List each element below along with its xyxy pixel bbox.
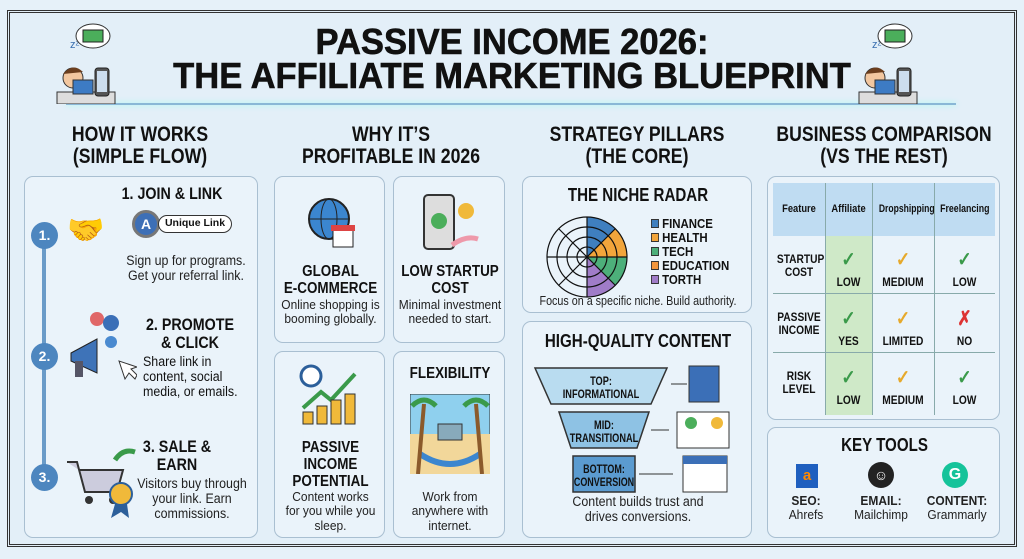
- legend: HEALTH: [662, 230, 708, 245]
- heading: strategy pillars: (THE CORE): [586, 145, 688, 168]
- icon: sleeping person left: zᶻ: [70, 39, 80, 51]
- icon: ahrefs: [796, 464, 818, 488]
- panel: flexibility: [393, 351, 505, 538]
- heading: how it works: HOW IT WORKS: [72, 123, 208, 146]
- icon: sleeping person left: [56, 24, 116, 104]
- table: ✓: [841, 249, 856, 271]
- heading: business comparison: (VS THE REST): [820, 145, 948, 168]
- legend: EDUCATION: [662, 258, 729, 273]
- panel: high-quality content: HIGH-QUALITY CONTENT: [545, 331, 731, 351]
- title: PASSIVE INCOME 2026:: [315, 21, 709, 62]
- panel: flexibility: FLEXIBILITY: [410, 365, 490, 382]
- panel: high-quality content: drives conversions.: [585, 509, 691, 524]
- panel: high-quality content: TOP:: [590, 376, 612, 388]
- heading: strategy pillars: STRATEGY PILLARS: [550, 123, 724, 146]
- icon: handshake: 🤝: [67, 214, 104, 247]
- table: Freelancing: [940, 203, 990, 215]
- heading: how it works: (SIMPLE FLOW): [73, 145, 207, 168]
- panel: key tools: [767, 427, 1000, 538]
- panel: high-quality content: Content builds trust and: [572, 494, 704, 509]
- icon: growth coins: [300, 364, 356, 424]
- icon: sleeping person right: zᶻ: [872, 39, 882, 51]
- panel: global e-commerce: GLOBAL: [302, 263, 359, 280]
- panel: how it works: media, or emails.: [143, 384, 238, 399]
- panel: how it works: [24, 176, 258, 538]
- table: MEDIUM: [882, 393, 924, 407]
- step 3: EARN: [157, 455, 197, 474]
- panel: key tools: Grammarly: [927, 507, 987, 522]
- table: INCOME: [779, 323, 819, 337]
- table: ✓: [896, 308, 910, 330]
- panel: flexibility: Work from: [423, 489, 477, 504]
- panel: key tools: KEY TOOLS: [841, 435, 928, 455]
- icon: grammarly: [942, 462, 968, 488]
- panel: low startup cost: COST: [431, 280, 469, 297]
- icon: mailchimp: [868, 462, 894, 488]
- timeline: [42, 232, 46, 482]
- legend: FINANCE: [662, 216, 713, 231]
- panel: global e-commerce: Online shopping is: [281, 297, 380, 312]
- panel: how it works: 2.: [39, 348, 50, 364]
- title: THE AFFILIATE MARKETING BLUEPRINT: [173, 55, 851, 96]
- panel: low startup cost: Minimal investment: [399, 297, 501, 312]
- heading: business comparison: BUSINESS COMPARISON: [776, 123, 992, 146]
- table: ✓: [896, 249, 910, 271]
- step numbers: [31, 222, 58, 249]
- icon: unique link: Unique Link: [165, 217, 225, 229]
- table: LOW: [837, 275, 860, 289]
- panel: how it works: content, social: [143, 369, 222, 384]
- panel: global e-commerce: E-COMMERCE: [284, 280, 377, 297]
- panel: passive income potential: sleep.: [315, 518, 346, 533]
- panel: passive income potential: PASSIVE: [302, 439, 359, 456]
- icon: megaphone: [70, 312, 137, 380]
- heading: why profitable: PROFITABLE IN 2026: [302, 145, 480, 168]
- panel: how it works: 3.: [39, 469, 50, 485]
- panel: niche radar: THE NICHE RADAR: [568, 185, 708, 205]
- panel: key tools: CONTENT:: [927, 493, 987, 508]
- icon: mailchimp: ☺: [874, 467, 888, 483]
- panel: comparison table: [767, 176, 1000, 420]
- panel: global e-commerce: [274, 176, 385, 343]
- radar chart: [546, 216, 628, 298]
- panel: high-quality content: INFORMATIONAL: [563, 389, 639, 401]
- divider glow: [66, 103, 956, 105]
- panel: flexibility: internet.: [428, 518, 472, 533]
- panel: high-quality content: [522, 321, 752, 538]
- heading: why profitable: [302, 123, 480, 168]
- table: STARTUP: [777, 252, 824, 266]
- table: LOW: [837, 393, 860, 407]
- panel: how it works: Share link in: [143, 354, 211, 369]
- table: [773, 183, 995, 415]
- icon: beach hammock: [410, 394, 490, 474]
- panel: key tools: Mailchimp: [854, 507, 908, 522]
- icon: sleeping person right: [858, 24, 918, 104]
- icon: phone money: [423, 194, 479, 250]
- panel: niche radar: Focus on a specific niche. Build authority.: [540, 294, 736, 308]
- table: ✗: [957, 308, 972, 330]
- panel: low startup cost: LOW STARTUP: [401, 263, 499, 280]
- panel: passive income potential: INCOME: [304, 456, 357, 473]
- table: Dropshipping: [879, 203, 935, 215]
- table: MEDIUM: [882, 275, 924, 289]
- table: COST: [785, 265, 813, 279]
- panel: global e-commerce: booming globally.: [284, 311, 377, 326]
- table: LOW: [953, 393, 976, 407]
- legend: TECH: [662, 244, 693, 259]
- panel: passive income potential: [274, 351, 385, 538]
- table: Feature: [782, 203, 816, 215]
- legend: [651, 216, 729, 287]
- step 2: & CLICK: [161, 333, 219, 352]
- panel: key tools: SEO:: [791, 493, 821, 508]
- panel: how it works: Sign up for programs.: [126, 253, 246, 268]
- table: ✓: [957, 367, 972, 389]
- table: RISK: [787, 369, 811, 383]
- icon: cart: [67, 448, 136, 518]
- step 1: 1. JOIN & LINK: [122, 184, 222, 203]
- funnel: [534, 366, 730, 493]
- panel: low startup cost: needed to start.: [408, 311, 492, 326]
- table: LOW: [953, 275, 976, 289]
- table: Affiliate: [831, 203, 866, 215]
- icon: grammarly: G: [949, 466, 961, 483]
- panel: high-quality content: MID:: [594, 420, 614, 432]
- table: ✓: [896, 367, 910, 389]
- table: LEVEL: [783, 382, 815, 396]
- panel: how it works: Visitors buy through: [137, 476, 247, 491]
- table: ✓: [841, 367, 856, 389]
- heading: business comparison: [776, 123, 992, 168]
- step 2: 2. PROMOTE: [146, 315, 234, 334]
- panel: key tools: EMAIL:: [860, 493, 902, 508]
- step 3: [143, 437, 211, 474]
- title: [173, 21, 851, 96]
- table: ✓: [841, 308, 856, 330]
- panel: passive income potential: for you while you: [286, 503, 375, 518]
- table: NO: [957, 334, 972, 348]
- panel: low startup cost: [393, 176, 505, 343]
- panel: flexibility: anywhere with: [412, 503, 488, 518]
- step numbers: 1.: [39, 227, 50, 243]
- panel: how it works: commissions.: [154, 506, 230, 521]
- panel: how it works: Get your referral link.: [128, 268, 244, 283]
- heading: how it works: [72, 123, 208, 168]
- panel: high-quality content: BOTTOM:: [583, 464, 625, 476]
- table: PASSIVE: [777, 310, 821, 324]
- icon: unique link: A: [141, 216, 151, 232]
- icon: ahrefs: a: [803, 467, 811, 484]
- heading: why profitable: WHY IT’S: [352, 123, 430, 146]
- panel: passive income potential: Content works: [292, 489, 369, 504]
- step 3: 3. SALE &: [143, 437, 211, 456]
- legend: TORTH: [662, 272, 701, 287]
- table: LIMITED: [883, 334, 923, 348]
- icon: unique link: [132, 210, 232, 238]
- panel: high-quality content: CONVERSION: [574, 477, 634, 489]
- panel: key tools: Ahrefs: [789, 507, 823, 522]
- table: YES: [838, 334, 859, 348]
- panel: high-quality content: TRANSITIONAL: [570, 433, 638, 445]
- panel: how it works: your link. Earn: [152, 491, 232, 506]
- panel: passive income potential: POTENTIAL: [292, 473, 369, 490]
- panel: niche radar: [522, 176, 752, 313]
- heading: strategy pillars: [550, 123, 724, 168]
- table: ✓: [957, 249, 972, 271]
- icon: globe: [308, 198, 355, 248]
- step 2: [146, 315, 234, 352]
